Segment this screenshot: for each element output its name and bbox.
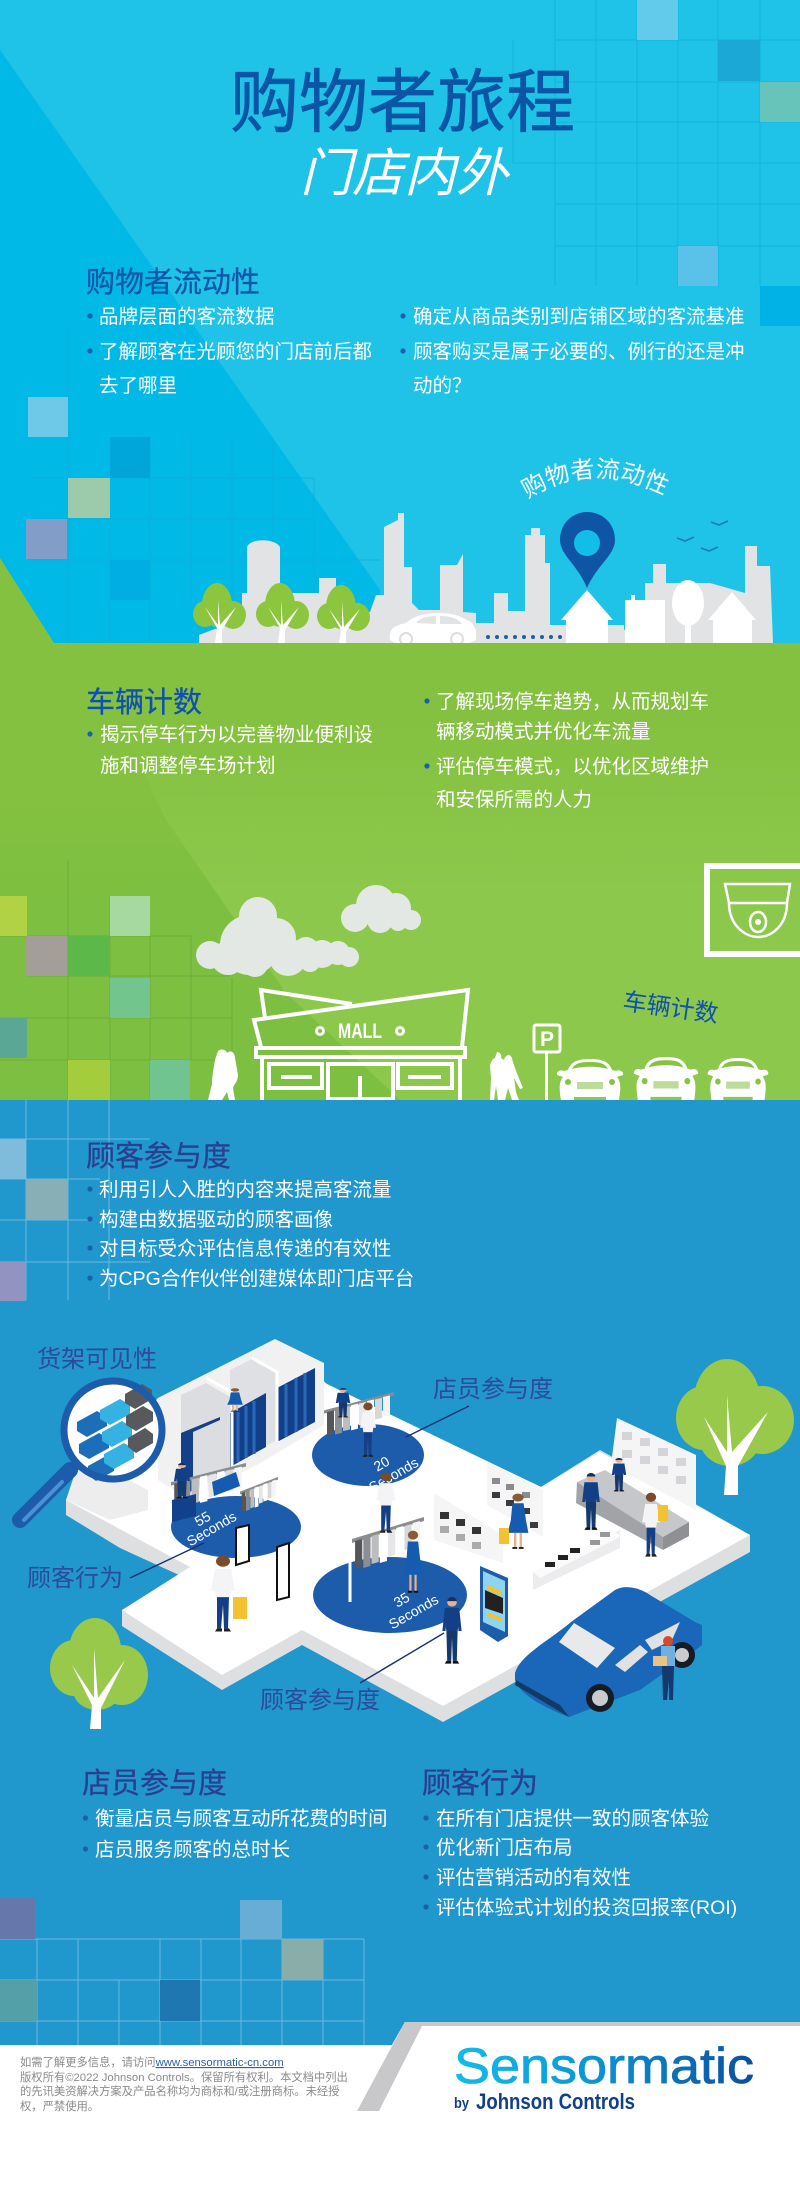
text block: vehicle counting left bullet: 揭示停车行为以完善物业便利设 — [100, 724, 373, 746]
panel: shopper mobility background — [0, 0, 800, 643]
logo: Sensormatic by Johnson Controls: Sensormatic — [454, 2038, 754, 2094]
shelf display center — [434, 1462, 543, 1563]
wall shelf behind counter — [611, 1418, 696, 1510]
fitting rooms — [66, 1339, 324, 1520]
heading: customer behaviour: 顾客行为 — [422, 1767, 538, 1800]
icon: location pin — [560, 512, 615, 588]
label: shelf visibility: 货架可见性 — [37, 1346, 157, 1373]
label: customer engagement: 顾客参与度 — [260, 1687, 380, 1714]
text block: shopper mobility right bullets: 确定从商品类别到店铺区域的客流基准 — [413, 306, 745, 328]
text block: vehicle counting right bullets — [424, 691, 709, 811]
icon: couple silhouette — [490, 1052, 523, 1100]
icon: mall building — [254, 990, 468, 1100]
logo: Sensormatic by Johnson Controls: Johnson Controls — [476, 2089, 635, 2114]
text block: staff engagement bullets: 衡量店员与顾客互动所花费的时间 — [95, 1808, 388, 1830]
heading: customer engagement: 顾客参与度 — [86, 1140, 231, 1173]
illustration: store floor plan — [66, 1339, 750, 1722]
text block: shopper mobility left bullets: 去了哪里 — [99, 375, 177, 397]
subtitle: 门店内外 — [300, 145, 511, 203]
logo: Sensormatic by Johnson Controls: by — [454, 2095, 470, 2112]
text block: customer engagement bullets: 对目标受众评估信息传递的有效性 — [99, 1238, 392, 1260]
label: vehicle counting rotated: 车辆计数 — [621, 988, 720, 1028]
icon: large tree — [676, 1359, 794, 1495]
title: 购物者旅程 — [230, 64, 575, 141]
icon: magnifier with shelf — [20, 1381, 162, 1520]
footer text: 权，严禁使用。 — [20, 2099, 99, 2113]
store floor — [66, 1388, 750, 1722]
text block: customer behaviour bullets: 评估体验式计划的投资回报率(ROI) — [436, 1897, 737, 1919]
shoppers and staff — [174, 1388, 668, 1664]
text block: shopper mobility right bullets: 顾客购买是属于必要的、例行的还是冲 — [413, 341, 745, 363]
text block: vehicle counting right bullets: 和安保所需的人力 — [436, 789, 592, 811]
heading: shopper mobility: 购物者流动性 — [86, 266, 260, 299]
icon: blue car and courier — [515, 1587, 702, 1717]
label: customer behaviour: 顾客行为 — [27, 1565, 123, 1592]
digital kiosk — [480, 1566, 508, 1642]
text block: customer behaviour bullets: 评估营销活动的有效性 — [436, 1867, 631, 1889]
text block: customer behaviour bullets: 优化新门店布局 — [436, 1837, 573, 1859]
icon: small tree — [50, 1618, 148, 1729]
low display — [533, 1530, 622, 1590]
dwell zone 55 seconds: Seconds — [184, 1508, 239, 1549]
text block: vehicle counting right bullets: 了解现场停车趋势，从而规划车 — [436, 691, 709, 713]
text block: staff engagement bullets — [83, 1808, 388, 1861]
text block: shopper mobility left bullets: 了解顾客在光顾您的门店前后都 — [99, 341, 372, 363]
trees — [193, 583, 370, 643]
text block: customer engagement bullets: 为CPG合作伙伴创建媒体即门店平台 — [99, 1268, 414, 1290]
label: staff engagement: 店员参与度 — [433, 1376, 553, 1403]
dwell zone 55 seconds: 55 — [192, 1508, 213, 1529]
icon: camera box — [707, 866, 800, 954]
birds — [677, 521, 728, 551]
icon: clouds — [196, 885, 421, 977]
dwell zone 20 seconds — [312, 1392, 424, 1495]
footer text — [20, 2055, 348, 2113]
footer text: 的先讯美资解决方案及产品名称均为商标和/或注册商标。未经授 — [20, 2084, 339, 2098]
security gates — [236, 1525, 289, 1600]
dwell zone 20 seconds: 20 — [371, 1453, 392, 1474]
icon: mall building: MALL — [338, 1020, 382, 1043]
text block: shopper mobility right bullets: 动的？ — [413, 375, 472, 397]
text block: shopper mobility right bullets — [400, 306, 745, 397]
houses — [561, 580, 756, 643]
panel: vehicle counting background — [0, 643, 800, 1100]
curved label: shopper mobility: 购物者流动性 — [520, 457, 669, 500]
logo: Sensormatic by Johnson Controls — [454, 2038, 754, 2114]
footer panel — [0, 2022, 800, 2207]
skyline illustration — [193, 512, 773, 645]
route dots — [486, 635, 570, 639]
heading: staff engagement: 店员参与度 — [82, 1767, 227, 1800]
footer text: 版权所有©2022 Johnson Controls。保留所有权利。本文档中列出 — [20, 2070, 348, 2084]
text block: vehicle counting right bullets: 评估停车模式，以优化区域维护 — [436, 756, 709, 778]
icon: parked cars — [557, 1057, 768, 1100]
heading: vehicle counting: 车辆计数 — [86, 686, 202, 719]
dwell zone 20 seconds: Seconds — [366, 1454, 421, 1495]
footer text: 如需了解更多信息，请访问www.sensormatic-cn.com — [20, 2055, 284, 2069]
dwell zone 35 seconds: Seconds — [386, 1591, 441, 1632]
dwell zone 35 seconds: 35 — [391, 1589, 412, 1610]
leader lines — [130, 1406, 469, 1683]
text block: customer engagement bullets: 利用引人入胜的内容来提高客流量 — [99, 1179, 392, 1201]
checkout counter — [576, 1470, 689, 1550]
text block: shopper mobility left bullets: 品牌层面的客流数据 — [99, 306, 275, 328]
text block: vehicle counting right bullets: 辆移动模式并优化车流量 — [436, 721, 651, 743]
icon: family silhouette — [208, 1050, 238, 1100]
icon: parking sign: P — [540, 1028, 554, 1051]
dwell zone 35 seconds — [313, 1517, 467, 1633]
icon: parking sign — [534, 1025, 560, 1100]
icon: white car — [390, 613, 476, 645]
text block: staff engagement bullets: 店员服务顾客的总时长 — [95, 1839, 290, 1861]
text block: vehicle counting left bullet — [87, 724, 373, 777]
text block: customer behaviour bullets — [423, 1808, 737, 1919]
text block: customer engagement bullets: 构建由数据驱动的顾客画像 — [99, 1209, 333, 1231]
text block: vehicle counting left bullet: 施和调整停车场计划 — [100, 755, 276, 777]
dwell zone 55 seconds — [171, 1463, 301, 1558]
text block: customer behaviour bullets: 在所有门店提供一致的顾客体验 — [436, 1808, 709, 1830]
panel: customer engagement background — [0, 1100, 800, 2045]
text block: shopper mobility left bullets — [87, 306, 372, 397]
text block: customer engagement bullets — [87, 1179, 414, 1290]
